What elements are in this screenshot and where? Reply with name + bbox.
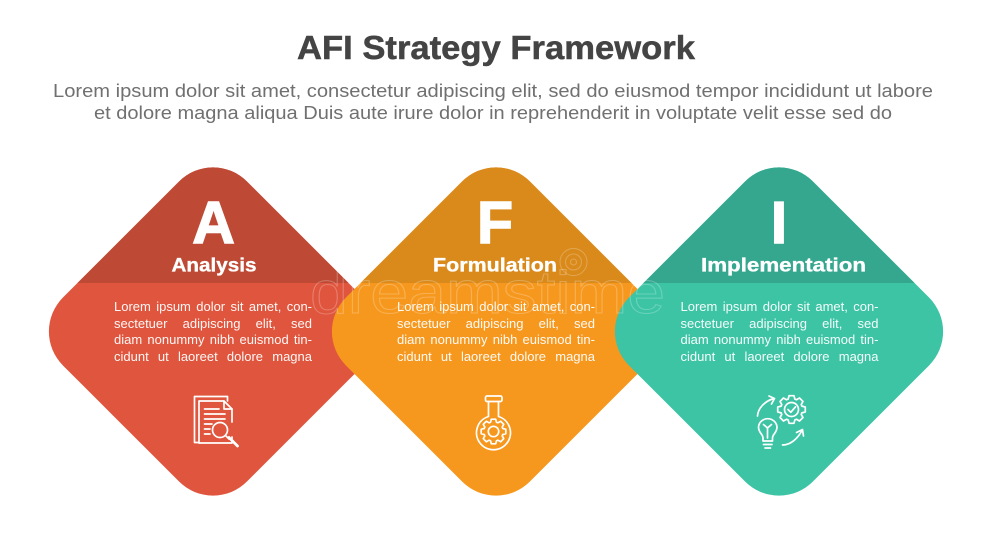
text block: implementation: cidunt ut laoreet dolore magna [680,349,878,364]
letter I: I [771,190,787,256]
panel: implementation [610,160,950,505]
subtitle text [53,80,933,123]
diamond: analysis [48,167,354,496]
watermark: dreamstime [310,259,665,326]
subtitle text: Lorem ipsum dolor sit amet, consectetur adipiscing elit, sed do eiusmod tempor incididunt ut labore [53,80,933,101]
text block: implementation: diam nonummy nibh euismod tin- [680,332,878,347]
heading: analysis: Analysis [172,254,257,276]
text block: implementation: sectetuer adipiscing elit, sed [680,316,878,331]
diamond: formulation [332,167,638,496]
icon: document search [194,396,238,446]
diamond: implementation [610,160,950,505]
letter F: F [477,190,513,256]
panel: formulation [332,167,638,496]
text block: formulation: Lorem ipsum dolor sit amet, con- [397,299,595,314]
subtitle text: et dolore magna aliqua Duis aute irure dolor in reprehenderit in voluptate velit esse sed do [94,102,892,123]
text block: analysis: Lorem ipsum dolor sit amet, con- [114,299,312,314]
text block: analysis: diam nonummy nibh euismod tin- [114,332,312,347]
text block: formulation: sectetuer adipiscing elit, sed [397,316,595,331]
text block: analysis: sectetuer adipiscing elit, sed [114,316,312,331]
text block: analysis [114,299,312,367]
letter A: A [192,190,235,256]
heading: formulation: Formulation [433,254,557,276]
icon: idea to gear cycle [758,396,805,448]
title: AFI Strategy Framework [297,29,696,66]
panel: analysis [48,167,354,496]
heading: implementation: Implementation [701,254,866,276]
text block: implementation [680,299,878,367]
text block: implementation: Lorem ipsum dolor sit amet, con- [680,299,878,314]
text block: formulation [397,299,595,367]
text block: formulation: diam nonummy nibh euismod tin- [397,332,595,347]
icon: flask with gear [476,396,511,450]
text block: formulation: cidunt ut laoreet dolore magna [397,349,595,364]
text block: analysis: cidunt ut laoreet dolore magna [114,349,312,364]
